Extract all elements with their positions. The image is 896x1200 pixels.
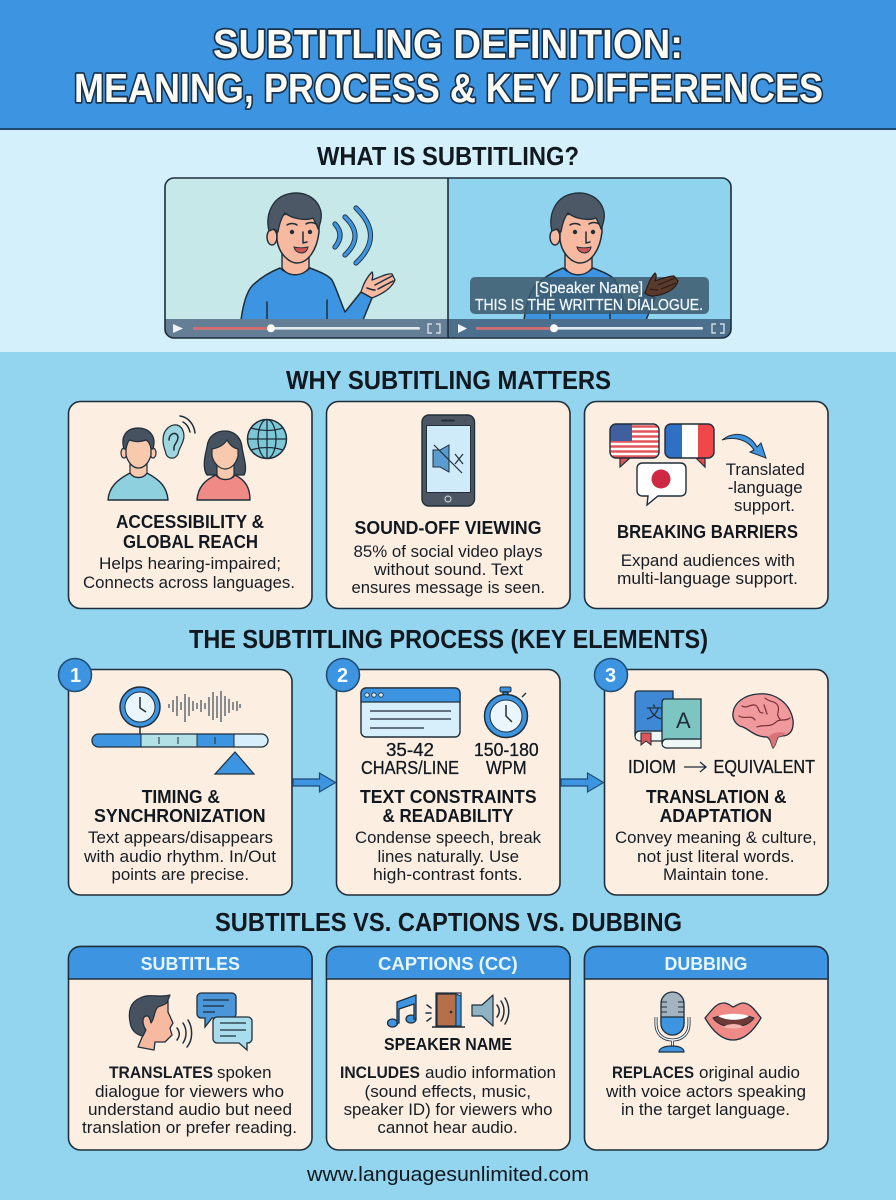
card text: REPLACES xyxy=(612,1063,694,1082)
card text: dialogue for viewers who xyxy=(95,1082,284,1101)
panel: accessibility and global reach xyxy=(68,402,312,608)
card text: spoken xyxy=(217,1063,272,1082)
stat: characters per line: CHARS/LINE xyxy=(361,757,459,778)
idiom to equivalent: IDIOM xyxy=(628,756,676,777)
card text: INCLUDES xyxy=(340,1063,420,1082)
heading: the subtitling process: THE SUBTITLING PROCESS (KEY ELEMENTS) xyxy=(189,624,708,654)
card heading xyxy=(646,786,786,826)
icon: ear xyxy=(163,416,195,458)
subtitle caption box xyxy=(470,277,709,314)
icon: speaker xyxy=(472,995,509,1026)
card header: SUBTITLES xyxy=(141,954,240,974)
translated-language note: support. xyxy=(734,496,795,515)
card text: Convey meaning & culture, xyxy=(615,828,817,847)
card header xyxy=(68,946,312,979)
card text: with audio rhythm. In/Out xyxy=(83,847,276,866)
icon: japan flag bubble xyxy=(637,463,686,505)
title: SUBTITLING DEFINITION: xyxy=(213,21,683,67)
icon: globe xyxy=(248,420,286,458)
icon: speaking head xyxy=(129,995,192,1050)
panel: sound-off viewing xyxy=(326,402,570,608)
icon: door xyxy=(426,993,465,1027)
card text: translation or prefer reading. xyxy=(82,1118,297,1137)
arrow: translation xyxy=(722,434,766,458)
card text xyxy=(352,542,545,597)
card text: understand audio but need xyxy=(88,1100,292,1119)
icon: france flag bubble xyxy=(665,424,714,467)
badge 2: 2 xyxy=(337,665,348,687)
card text xyxy=(83,554,295,592)
panel: step 2 text constraints xyxy=(326,658,560,895)
card heading xyxy=(94,786,266,826)
icon: speech bubbles xyxy=(197,993,252,1050)
stat: words per minute xyxy=(474,739,539,778)
card text xyxy=(83,828,276,884)
card text: TRANSLATES xyxy=(109,1063,213,1082)
card header xyxy=(584,946,828,979)
card text: Maintain tone. xyxy=(663,865,769,884)
card heading: TRANSLATION & xyxy=(646,786,786,807)
card text: Connects across languages. xyxy=(83,573,295,592)
video controls right xyxy=(458,324,724,333)
translated-language note: Translated xyxy=(726,460,805,479)
icon: waveform xyxy=(169,691,240,722)
card heading xyxy=(360,786,537,826)
icon: music note xyxy=(388,995,416,1027)
video controls left xyxy=(173,324,440,333)
panel: video comparison xyxy=(165,178,731,338)
idiom to equivalent xyxy=(628,756,815,777)
card text: ensures message is seen. xyxy=(352,578,545,597)
card text: speaker ID) for viewers who xyxy=(344,1100,552,1119)
card text xyxy=(82,1063,297,1137)
icon: microphone xyxy=(656,992,689,1052)
card text: lines naturally. Use xyxy=(378,847,519,866)
translated-language note: -language xyxy=(728,478,803,497)
card text xyxy=(615,828,817,884)
card text: multi-language support. xyxy=(617,569,798,588)
icon: lips xyxy=(705,1003,761,1040)
icon: muted phone xyxy=(422,415,474,506)
card heading: ADAPTATION xyxy=(660,805,772,826)
icon: us flag bubble xyxy=(610,424,659,467)
icon: text window xyxy=(361,688,460,737)
card heading: ACCESSIBILITY & xyxy=(116,511,264,532)
card heading: TIMING & xyxy=(142,786,220,807)
card text: Expand audiences with xyxy=(621,551,795,570)
card text: Helps hearing-impaired; xyxy=(99,554,281,573)
card header: DUBBING xyxy=(664,954,748,974)
icon: man xyxy=(108,428,168,500)
translated-language note xyxy=(726,460,805,515)
badge 1 xyxy=(58,658,92,692)
card header: CAPTIONS (CC) xyxy=(378,954,518,974)
panel: step 1 timing xyxy=(58,658,292,895)
stat: words per minute: 150-180 xyxy=(474,739,539,760)
badge 2 xyxy=(326,658,360,692)
card text: Condense speech, break xyxy=(355,828,541,847)
card text: in the target language. xyxy=(621,1100,790,1119)
card text xyxy=(605,1063,806,1119)
card heading: SYNCHRONIZATION xyxy=(94,805,266,826)
subtitle caption box: THIS IS THE WRITTEN DIALOGUE. xyxy=(475,297,703,314)
card heading: TEXT CONSTRAINTS xyxy=(360,786,537,807)
panel: captions xyxy=(326,946,570,1150)
card heading xyxy=(116,511,264,552)
badge 3: 3 xyxy=(605,665,616,687)
heading: why subtitling matters: WHY SUBTITLING MATTERS xyxy=(286,365,611,395)
footer url: www.languagesunlimited.com xyxy=(306,1164,589,1186)
card text: high-contrast fonts. xyxy=(373,865,522,884)
heading: what is subtitling: WHAT IS SUBTITLING? xyxy=(317,141,579,171)
stat: words per minute: WPM xyxy=(486,757,527,778)
icon: language books: 文 xyxy=(646,704,662,722)
card header xyxy=(326,946,570,979)
icon: language books: A xyxy=(676,708,691,733)
card text: cannot hear audio. xyxy=(377,1118,518,1137)
card heading: & READABILITY xyxy=(382,805,514,826)
card text xyxy=(617,551,798,588)
icon: woman xyxy=(197,431,250,500)
card text: (sound effects, music, xyxy=(364,1082,531,1101)
panel: dubbing xyxy=(584,946,828,1150)
card text xyxy=(355,828,541,884)
panel: step 3 translation xyxy=(594,658,828,895)
timeline bar xyxy=(92,734,268,747)
card text: without sound. Text xyxy=(373,560,523,579)
card text: points are precise. xyxy=(112,865,249,884)
card text: with voice actors speaking xyxy=(605,1082,806,1101)
card text: original audio xyxy=(699,1063,800,1082)
section background: what is subtitling xyxy=(0,130,896,352)
title xyxy=(74,21,823,111)
icon: dark hand xyxy=(645,273,678,296)
card heading: SOUND-OFF VIEWING xyxy=(354,517,542,538)
icon: hand gesture xyxy=(361,272,395,298)
card text: Text appears/disappears xyxy=(88,828,273,847)
arrow: step 2 to 3 xyxy=(561,773,604,792)
icon: clock xyxy=(120,687,160,735)
icon: brain xyxy=(733,694,793,748)
badge 3 xyxy=(594,658,628,692)
panel: subtitles xyxy=(68,946,312,1150)
card heading: BREAKING BARRIERS xyxy=(617,521,798,542)
arrow: step 1 to 2 xyxy=(293,773,336,792)
illustration: speaker with subtitles xyxy=(524,193,655,320)
panel: breaking barriers xyxy=(584,402,828,608)
illustration: speaker without subtitles xyxy=(241,193,372,320)
icon: sound waves xyxy=(335,208,370,263)
badge 1: 1 xyxy=(70,665,81,687)
card text: audio information xyxy=(425,1063,556,1082)
card heading: GLOBAL REACH xyxy=(123,531,258,552)
heading: comparison: SUBTITLES VS. CAPTIONS VS. DUBBING xyxy=(215,907,682,937)
icon: playhead triangle xyxy=(215,752,254,774)
stat: characters per line: 35-42 xyxy=(386,739,434,760)
card text xyxy=(340,1063,556,1137)
card text: 85% of social video plays xyxy=(354,542,542,561)
idiom to equivalent: EQUIVALENT xyxy=(714,756,815,777)
icon: stopwatch xyxy=(484,687,528,738)
header banner xyxy=(0,0,896,130)
icon: language books xyxy=(635,691,701,748)
stat: characters per line xyxy=(361,739,459,778)
subtitle caption box: [Speaker Name] xyxy=(535,280,643,297)
sound label: speaker name: SPEAKER NAME xyxy=(384,1034,512,1054)
card text: not just literal words. xyxy=(637,847,795,866)
